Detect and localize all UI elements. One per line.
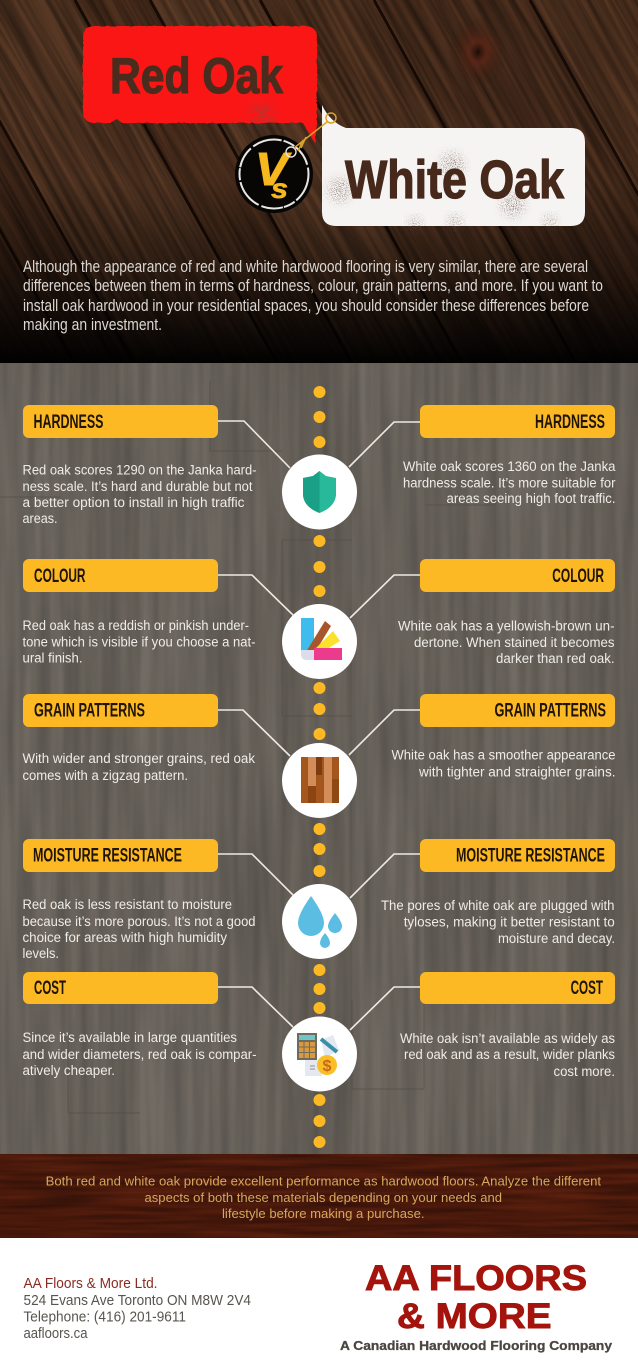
panel: footer	[0, 1238, 638, 1369]
closing text	[46, 1174, 601, 1221]
text: colour red oak: ural finish.	[22, 650, 82, 666]
company logo	[340, 1259, 613, 1353]
heading: grain white oak	[420, 694, 615, 727]
text: cost red oak: Since it’s available in large quantities	[22, 1030, 237, 1045]
icon: calculator and coin: $	[323, 1058, 332, 1075]
vs badge	[235, 113, 336, 213]
icon: calculator and coin	[282, 1016, 357, 1092]
heading: cost white oak: COST	[571, 977, 603, 999]
heading: hardness white oak	[420, 405, 615, 438]
text: moisture red oak: Red oak is less resistant to moisture	[22, 897, 232, 912]
text: hardness white oak	[403, 459, 616, 506]
dotted centre line	[314, 386, 326, 1148]
company logo: & MORE	[397, 1297, 552, 1336]
heading: colour red oak: COLOUR	[34, 565, 86, 587]
text: moisture white oak	[381, 898, 615, 946]
heading: moisture white oak	[420, 839, 615, 872]
text: moisture white oak: The pores of white oak are plugged with	[381, 898, 614, 913]
text: colour white oak	[398, 618, 615, 666]
panel: closing band	[0, 1154, 638, 1238]
text: cost red oak: atively cheaper.	[22, 1063, 115, 1078]
intro text: making an investment.	[23, 316, 162, 334]
text: grain white oak: White oak has a smoother appearance	[392, 748, 616, 762]
contact details: aafloors.ca	[24, 1326, 88, 1342]
text: moisture red oak: levels.	[22, 946, 59, 961]
heading: cost red oak: COST	[34, 977, 66, 999]
contact details: AA Floors & More Ltd.	[24, 1276, 158, 1292]
text: hardness red oak: ness scale. It’s hard and durable but not	[22, 479, 253, 494]
heading: colour white oak: COLOUR	[552, 565, 604, 587]
text: colour red oak: Red oak has a reddish or pinkish under-	[22, 618, 249, 633]
intro text	[23, 258, 603, 334]
text: grain red oak	[22, 751, 255, 783]
heading: colour red oak	[23, 559, 218, 592]
text: grain white oak	[392, 748, 616, 780]
text: colour red oak	[22, 618, 256, 666]
closing text: aspects of both these materials depending on your needs and	[144, 1190, 502, 1205]
text: moisture red oak: choice for areas with high humidity	[22, 930, 227, 945]
row: grain patterns	[22, 694, 616, 818]
white oak bubble	[322, 105, 585, 231]
panel: dark wood header background	[0, 0, 638, 363]
text: moisture white oak: tyloses, making it better resistant to	[404, 914, 615, 930]
heading: colour white oak	[420, 559, 615, 592]
text: colour white oak: White oak has a yellowish-brown un-	[398, 618, 614, 634]
text: cost white oak: red oak and as a result, wider planks	[404, 1047, 615, 1062]
heading: grain red oak	[23, 694, 218, 727]
company logo: A Canadian Hardwood Flooring Company	[340, 1338, 613, 1353]
text: hardness white oak: hardness scale. It’s more suitable for	[403, 476, 616, 490]
text: grain red oak: comes with a zigzag pattern.	[22, 768, 188, 783]
text: moisture red oak: because it’s more porous. It’s not a good	[22, 914, 256, 929]
text: grain white oak: with tighter and straighter grains.	[418, 764, 616, 780]
text: colour red oak: tone which is visible if you choose a nat-	[22, 634, 256, 650]
text: cost red oak	[22, 1030, 256, 1078]
vs badge: V	[255, 143, 292, 195]
text: moisture white oak: moisture and decay.	[498, 931, 615, 946]
heading: cost white oak	[420, 972, 615, 1004]
text: hardness red oak: a better option to install in high traffic	[22, 495, 245, 510]
icon: water drops	[282, 884, 357, 959]
red oak bubble: Red Oak	[110, 48, 283, 104]
row: colour	[22, 559, 615, 679]
heading: grain red oak: GRAIN PATTERNS	[34, 700, 145, 722]
text: grain red oak: With wider and stronger grains, red oak	[22, 751, 255, 766]
heading: hardness red oak	[23, 405, 218, 438]
text: hardness red oak: areas.	[22, 511, 58, 526]
text: hardness red oak: Red oak scores 1290 on the Janka hard-	[22, 462, 256, 478]
icon: colour swatches	[282, 604, 357, 679]
text: cost white oak: cost more.	[554, 1064, 615, 1079]
icon: wood planks	[282, 743, 357, 818]
row: moisture resistance	[22, 839, 615, 961]
text: hardness white oak: White oak scores 1360 on the Janka	[403, 459, 616, 474]
closing text: Both red and white oak provide excellent performance as hardwood floors. Analyze the different	[46, 1174, 601, 1188]
icon: shield	[282, 454, 357, 530]
closing text: lifestyle before making a purchase.	[222, 1206, 424, 1221]
text: hardness red oak	[22, 462, 256, 526]
white oak bubble: White Oak	[345, 150, 565, 210]
heading: moisture red oak: MOISTURE RESISTANCE	[33, 844, 182, 866]
red oak bubble	[83, 26, 317, 143]
contact details	[24, 1276, 251, 1342]
heading: hardness red oak: HARDNESS	[34, 411, 104, 433]
text: moisture red oak	[22, 897, 256, 961]
text: cost red oak: and wider diameters, red oak is compar-	[22, 1047, 256, 1062]
heading: cost red oak	[23, 972, 218, 1004]
text: hardness white oak: areas seeing high foot traffic.	[446, 491, 616, 506]
panel: title bubbles	[83, 26, 585, 231]
row: hardness	[22, 405, 616, 530]
vs badge: s	[271, 173, 288, 204]
contact details: Telephone: (416) 201-9611	[24, 1310, 186, 1326]
text: cost white oak	[400, 1031, 615, 1079]
row: cost	[22, 972, 615, 1092]
text: colour white oak: dertone. When stained it becomes	[414, 635, 615, 650]
text: cost white oak: White oak isn’t available as widely as	[400, 1031, 615, 1046]
panel: grey wood planks background	[0, 363, 638, 1155]
heading: moisture red oak	[23, 839, 218, 872]
contact details: 524 Evans Ave Toronto ON M8W 2V4	[24, 1293, 251, 1309]
company logo: AA FLOORS	[365, 1259, 587, 1298]
text: colour white oak: darker than red oak.	[496, 651, 614, 666]
